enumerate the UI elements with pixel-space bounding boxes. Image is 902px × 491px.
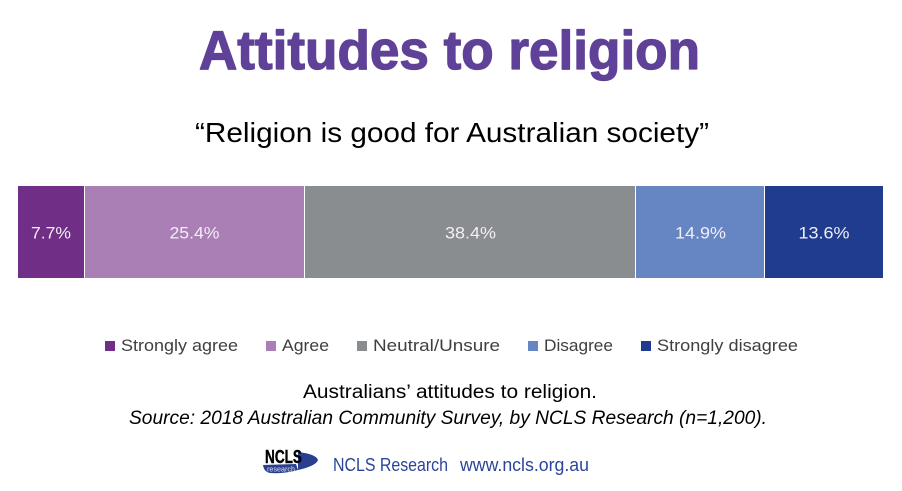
stacked bar chart bbox=[18, 186, 883, 278]
segment: strongly disagree 13.6% bbox=[765, 186, 883, 278]
caption line: Australians’ attitudes to religion. bbox=[303, 382, 597, 403]
segment: disagree 14.9%: 14.9% bbox=[675, 224, 726, 242]
legend item: disagree: Disagree bbox=[544, 336, 613, 355]
segment: agree 25.4%: 25.4% bbox=[170, 224, 220, 242]
icon: NCLS Research logo: research bbox=[267, 466, 295, 474]
icon: NCLS Research logo: NCLS bbox=[265, 447, 302, 467]
segment: disagree 14.9% bbox=[636, 186, 764, 278]
segment: strongly disagree 13.6%: 13.6% bbox=[798, 224, 850, 242]
source line: Source: 2018 Australian Community Survey, by NCLS Research (n=1,200). bbox=[129, 408, 767, 429]
icon: NCLS Research logo bbox=[263, 447, 318, 474]
segment: neutral/unsure 38.4%: 38.4% bbox=[445, 224, 496, 242]
footer website: www.ncls.org.au bbox=[459, 455, 589, 475]
subtitle: “Religion is good for Australian society” bbox=[195, 117, 709, 148]
legend item: neutral/unsure: Neutral/Unsure bbox=[373, 336, 500, 355]
segment: strongly agree 7.7%: 7.7% bbox=[31, 224, 71, 242]
caption bbox=[129, 382, 767, 429]
segment: strongly agree 7.7% bbox=[18, 186, 84, 278]
segment: neutral/unsure 38.4% bbox=[305, 186, 635, 278]
legend item: strongly agree: Strongly agree bbox=[121, 336, 238, 355]
title: Attitudes to religion bbox=[199, 19, 700, 81]
legend item: strongly disagree: Strongly disagree bbox=[657, 336, 798, 355]
legend bbox=[105, 336, 798, 355]
legend item: agree: Agree bbox=[282, 336, 329, 355]
segment: agree 25.4% bbox=[85, 186, 304, 278]
footer organisation name: NCLS Research bbox=[333, 455, 448, 475]
